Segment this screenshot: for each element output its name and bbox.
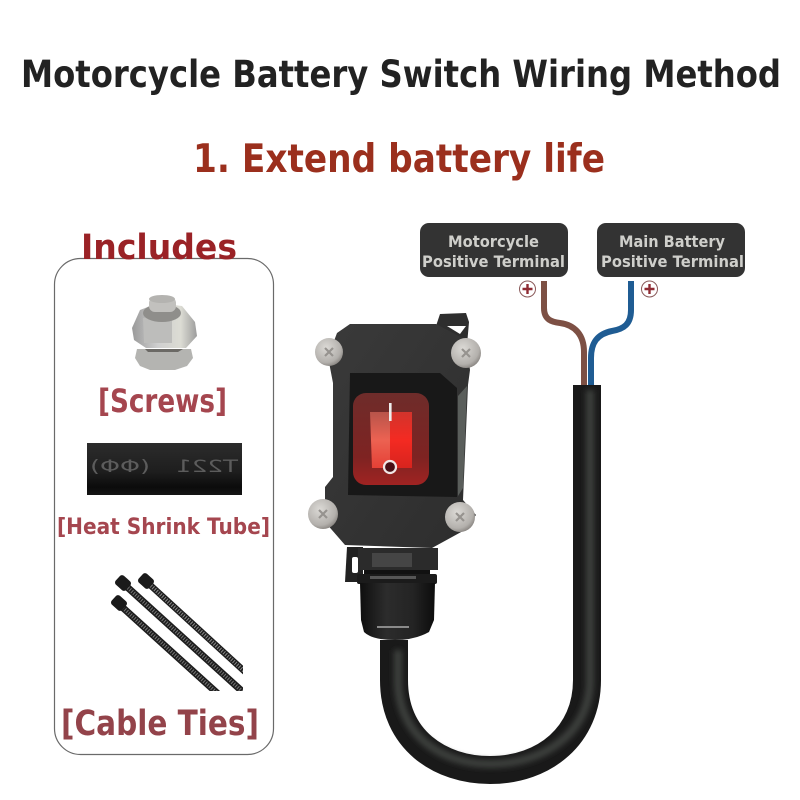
rocker [353,393,429,485]
side strip [458,386,467,496]
tie straps [120,584,243,691]
label: main battery positive terminal [597,223,745,277]
icon: cable ties [111,573,243,691]
label: heat shrink tube: [Heat Shrink Tube] [57,515,270,540]
label: screws: [Screws] [98,382,227,420]
label: motorcycle positive terminal: Motorcycle [448,232,539,251]
tube print left: (ΦΦ) [90,457,150,477]
label: cable ties: [Cable Ties] [61,704,259,744]
wire: blue [591,281,631,387]
switch recess [348,373,457,497]
housing [325,324,476,548]
label: main battery positive terminal: Main Battery [619,232,726,251]
cable [394,385,590,770]
switch [308,313,481,640]
heading: includes: Includes [81,228,237,268]
cable gland [345,547,438,640]
tab hole [447,326,466,334]
icon: screw and nut [132,295,197,370]
icon: heat shrink tube [87,443,242,495]
panel: includes [54,228,274,754]
wire: brown [544,281,584,387]
icon: plus main battery [642,281,658,297]
label: motorcycle positive terminal [420,223,568,277]
icon: plus motorcycle [520,281,536,297]
screws [308,338,481,532]
subtitle: 1. Extend battery life [193,137,605,182]
label: main battery positive terminal: Positive Terminal [601,252,744,271]
mounting tab [436,313,469,345]
label: motorcycle positive terminal: Positive Terminal [422,252,565,271]
tie heads [110,572,155,612]
tube print right: T221 [176,457,239,477]
